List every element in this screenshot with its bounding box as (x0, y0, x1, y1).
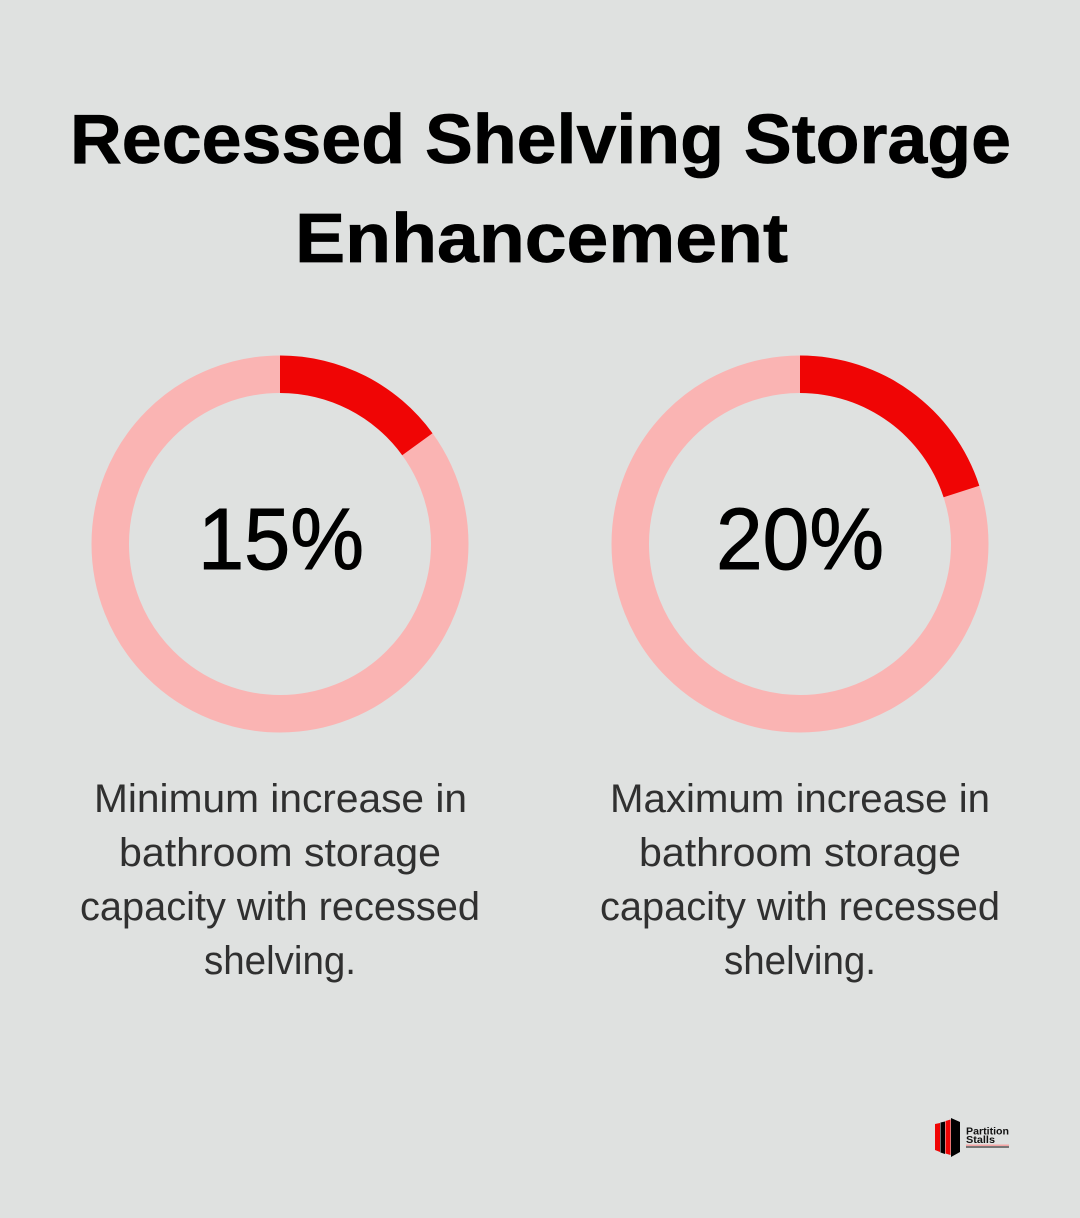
value: 20%: 20% (716, 491, 884, 588)
wordmark (966, 1126, 1009, 1146)
description: shelving. (204, 939, 356, 983)
title: Enhancement (295, 199, 788, 277)
description: capacity with recessed (600, 885, 1000, 929)
description: bathroom storage (639, 831, 961, 875)
description: Minimum increase in (94, 777, 467, 821)
description: shelving. (724, 939, 876, 983)
description (600, 777, 1000, 983)
title (70, 100, 1011, 277)
panel: 20% maximum increase (600, 356, 1000, 983)
wordmark: Partition (966, 1126, 1009, 1138)
description: capacity with recessed (80, 885, 480, 929)
donut chart: 20% (630, 356, 979, 714)
title: Recessed Shelving Storage (70, 100, 1011, 178)
icon: partition panels (935, 1118, 960, 1157)
panel: 15% minimum increase (80, 356, 480, 983)
description (80, 777, 480, 983)
description: bathroom storage (119, 831, 441, 875)
donut chart: 15% (110, 356, 450, 714)
value: 15%: 15% (198, 491, 364, 588)
description: Maximum increase in (610, 777, 990, 821)
tagline strip (966, 1144, 1009, 1148)
logo: Partition Stalls (935, 1118, 1009, 1157)
wordmark: Stalls (966, 1134, 995, 1146)
